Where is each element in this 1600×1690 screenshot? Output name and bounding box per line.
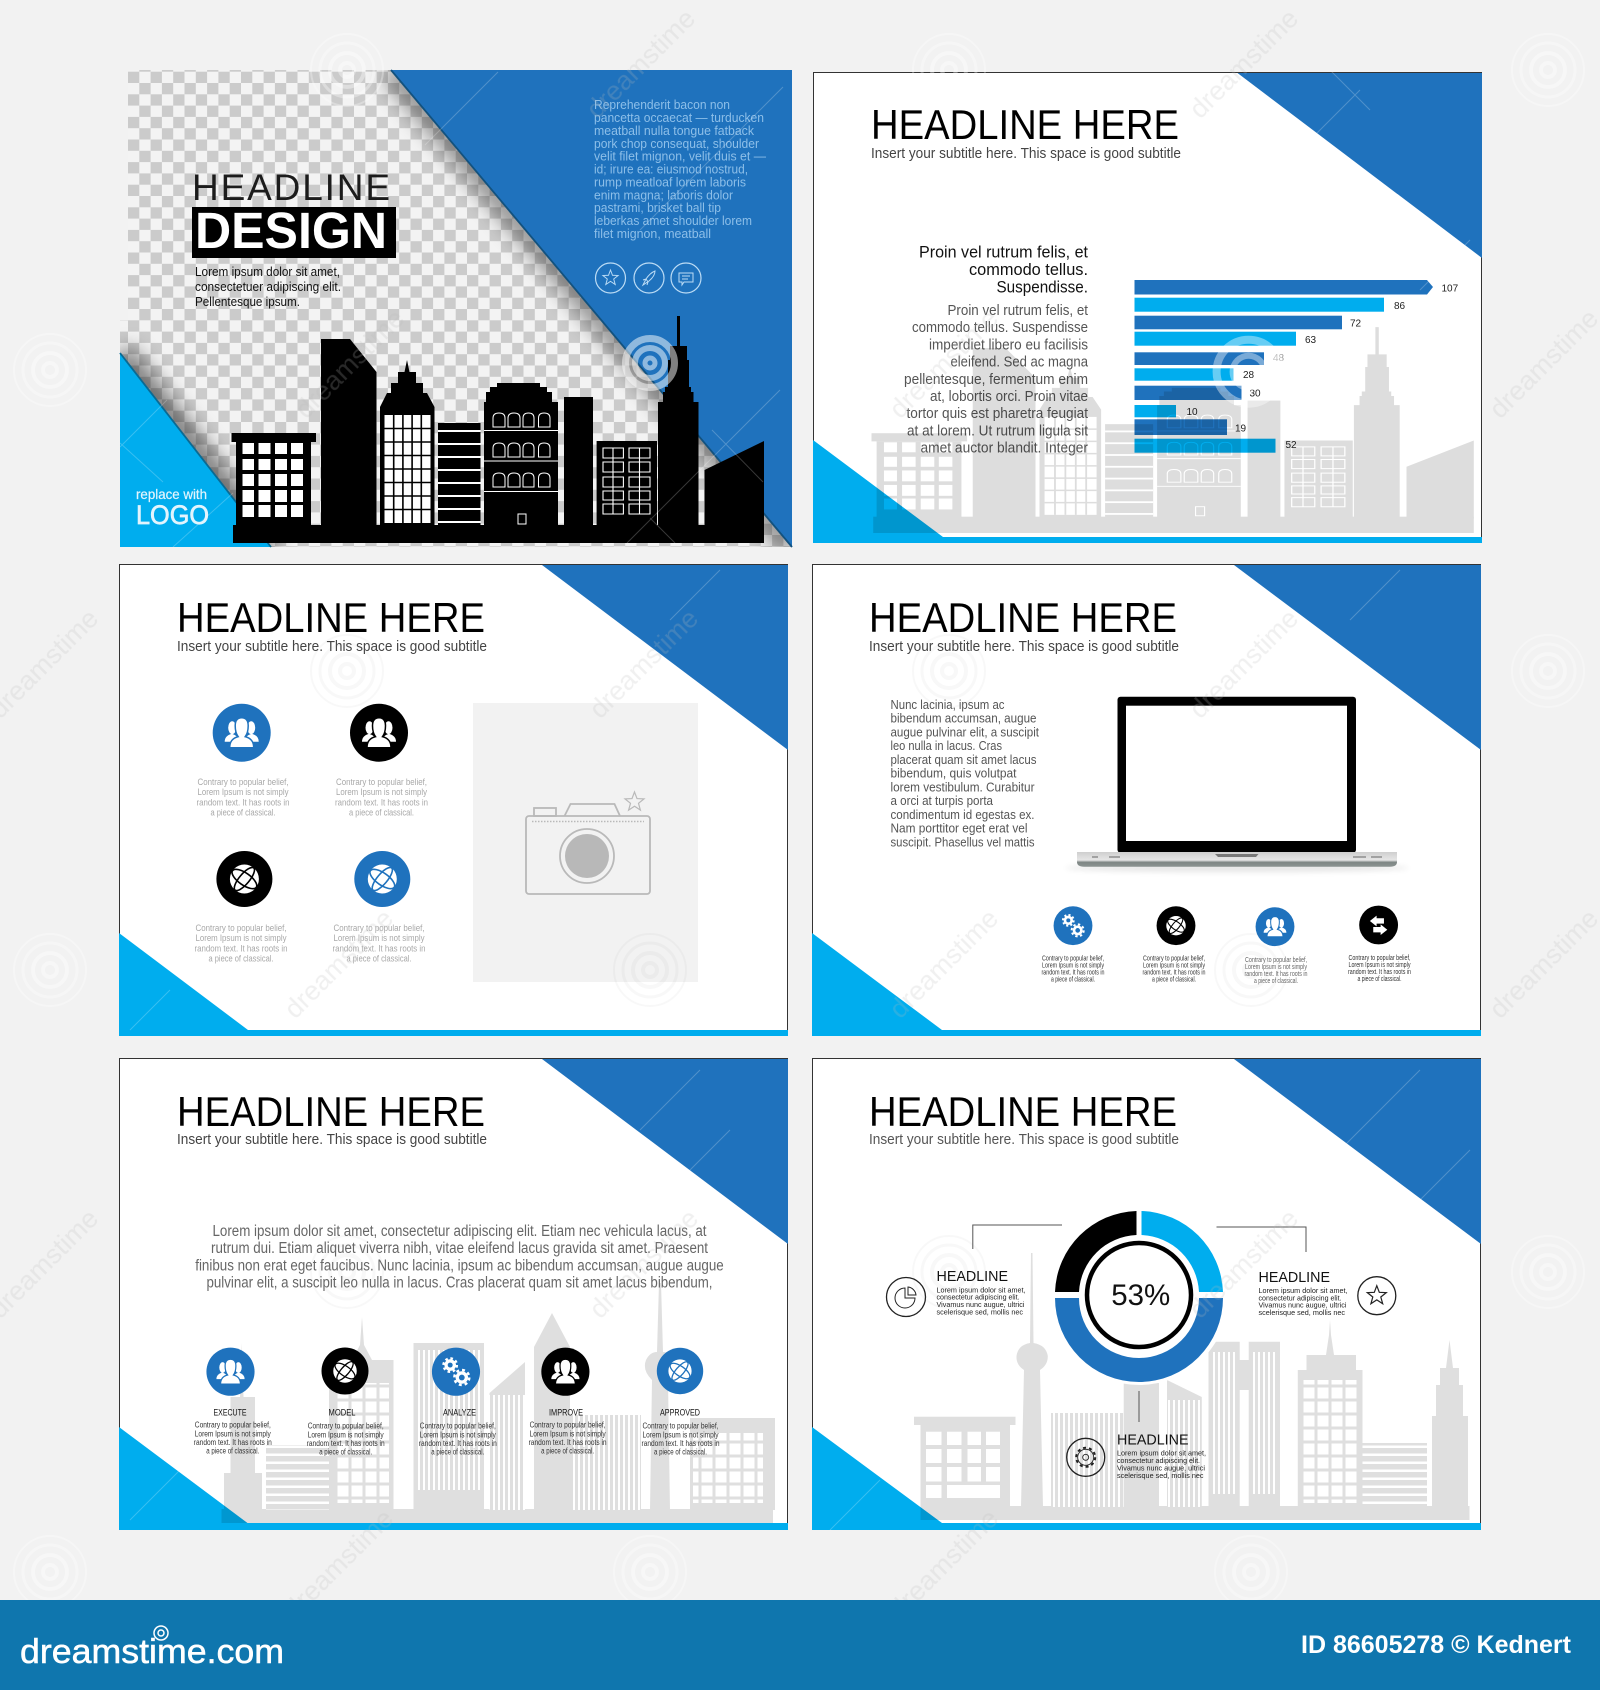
step: approved — [642, 1348, 720, 1456]
body paragraph: amet auctor blandit. Integer — [920, 440, 1088, 457]
intro paragraph: Lorem ipsum dolor sit amet, consectetur adipiscing elit. Etiam nec vehicula lacus, at — [212, 1223, 707, 1240]
caption 1: random text. It has roots in — [1042, 970, 1105, 977]
body paragraph: placerat quam sit amet lacus — [890, 753, 1036, 767]
horizontal bar chart — [1134, 280, 1459, 453]
grey city skyline — [872, 327, 1474, 533]
icon: people blue — [213, 704, 271, 762]
headline: HEADLINE HERE — [177, 594, 485, 641]
intro paragraph: rutrum dui. Etiam aliquet viverra nibh, vitae eleifend lacus gravida sit amet. Praesent — [211, 1240, 709, 1257]
blue corner triangle — [1234, 565, 1481, 750]
step: improve: random text. It has roots in — [529, 1438, 607, 1447]
caption 4: Contrary to popular belief, — [334, 923, 424, 933]
horizontal bar chart: 72 — [1350, 318, 1362, 330]
headline: HEADLINE HERE — [871, 101, 1179, 148]
body paragraph: condimentum id egestas ex. — [890, 808, 1034, 822]
icon: camera — [526, 792, 650, 894]
body paragraph — [890, 698, 1039, 849]
logo placeholder: LOGO — [136, 500, 209, 530]
headline: HEADLINE HERE — [869, 1088, 1177, 1135]
light blue corner and strip — [813, 440, 1482, 543]
watermark spirals on white slides — [311, 635, 1287, 1308]
caption 2: random text. It has roots in — [1142, 970, 1206, 977]
light blue corner and strip — [812, 1427, 1481, 1530]
step: approved: Lorem Ipsum is not simply — [642, 1430, 718, 1439]
light blue corner triangle — [120, 353, 271, 547]
watermark text: dreamstime — [883, 903, 1004, 1024]
caption 4 — [1348, 955, 1411, 983]
callout: right: HEADLINE — [1258, 1270, 1330, 1286]
caption 1 — [1042, 956, 1105, 984]
caption 4: Lorem Ipsum is not simply — [1348, 962, 1411, 969]
caption 1: Contrary to popular belief, — [1042, 956, 1104, 963]
blue panel text: velit filet mignon, velit duis et — — [594, 150, 766, 164]
callout: left: scelerisque sed, mollis nec — [936, 1307, 1023, 1316]
intro paragraph — [195, 1223, 724, 1292]
callout: bottom: scelerisque sed, mollis nec — [1117, 1471, 1204, 1480]
blue panel text: filet mignon, meatball — [594, 227, 711, 241]
bold lead text: Proin vel rutrum felis, et — [919, 244, 1088, 262]
blue panel text: meatball nulla tongue fatback — [594, 124, 755, 138]
blue panel text: enim magna; laboris dolor — [594, 188, 733, 202]
horizontal bar chart: 28 — [1243, 370, 1255, 381]
watermark cross lines — [120, 70, 1470, 1530]
callout: bottom — [1067, 1432, 1206, 1480]
icon: gears blue — [1054, 906, 1092, 945]
step: execute: Contrary to popular belief, — [195, 1421, 271, 1430]
horizontal bar chart: 19 — [1235, 424, 1247, 434]
cover intro text: Pellentesque ipsum. — [195, 295, 300, 309]
icon: rocket in circle — [634, 263, 664, 293]
watermark text: dreamstime — [883, 1503, 1004, 1624]
callout: bottom: consectetur adipiscing elit. — [1117, 1456, 1200, 1465]
panel: cover slide — [120, 70, 792, 547]
caption 3: a piece of classical. — [1254, 978, 1298, 985]
blue panel text: pancetta occaecat — turducken — [594, 111, 764, 125]
caption 1: a piece of classical. — [1051, 977, 1095, 984]
callout: bottom: Lorem ipsum dolor sit amet, — [1117, 1449, 1206, 1458]
step: analyze — [419, 1348, 497, 1456]
blue panel text: leberkas amet shoulder lorem — [594, 214, 752, 228]
caption 4: random text. It has roots in — [332, 943, 426, 953]
body paragraph: at at lorem. Ut rutrum ligula sit — [907, 422, 1089, 439]
body paragraph: pellentesque, fermentum enim — [904, 371, 1088, 388]
body paragraph: lorem vestibulum. Curabitur — [890, 780, 1034, 794]
logo placeholder: replace with — [136, 486, 207, 502]
icon: people black — [350, 704, 408, 762]
logo placeholder — [136, 486, 209, 530]
bold lead text — [919, 244, 1088, 296]
body paragraph: tortor quis est pharetra feugiat — [906, 405, 1089, 422]
watermark text: dreamstime — [278, 1503, 399, 1624]
icon: globe blue — [354, 851, 410, 907]
step: improve — [529, 1348, 607, 1456]
step: analyze: Lorem Ipsum is not simply — [420, 1430, 496, 1439]
watermark text: dreamstime — [1183, 3, 1304, 124]
caption 4: random text. It has roots in — [1348, 969, 1411, 976]
body paragraph: bibendum, quis volutpat — [890, 767, 1017, 781]
step: improve: Contrary to popular belief, — [530, 1421, 606, 1430]
step: analyze: ANALYZE — [443, 1408, 476, 1418]
body paragraph — [904, 302, 1089, 457]
callout: right: Vivamus nunc augue, ultrici — [1258, 1301, 1347, 1310]
watermark text: dreamstime — [1183, 1203, 1304, 1324]
caption 3: random text. It has roots in — [194, 943, 288, 953]
icon: chat bubble in circle — [671, 263, 701, 293]
caption 1: random text. It has roots in — [196, 797, 290, 807]
step: approved: Contrary to popular belief, — [642, 1422, 718, 1431]
blue panel text — [594, 98, 766, 241]
watermark text: dreamstime — [883, 303, 1004, 424]
caption 3: a piece of classical. — [208, 954, 274, 964]
horizontal bar chart: 48 — [1273, 353, 1285, 364]
caption 2: a piece of classical. — [349, 808, 414, 818]
horizontal bar chart: 52 — [1286, 440, 1297, 451]
body paragraph: Proin vel rutrum felis, et — [948, 302, 1089, 319]
connector lines — [973, 1225, 1306, 1422]
callout: right: consectetur adipiscing elit. — [1258, 1293, 1342, 1302]
body paragraph: Nam porttitor eget erat vel — [890, 822, 1028, 836]
step: model — [307, 1348, 385, 1456]
callout: left — [886, 1269, 1026, 1316]
step: improve: a piece of classical. — [541, 1446, 594, 1456]
body paragraph: leo nulla in lacus. Cras — [890, 739, 1002, 753]
grey city skyline — [222, 1283, 775, 1523]
callout: bottom: HEADLINE — [1117, 1432, 1189, 1448]
footer image id: ID 86605278 © Kednert — [1301, 1631, 1572, 1659]
caption 4: a piece of classical. — [1358, 976, 1402, 983]
callout: right: Lorem ipsum dolor sit amet, — [1258, 1286, 1348, 1295]
caption 2: Lorem Ipsum is not simply — [336, 787, 427, 797]
strong watermark spiral on chart — [1217, 340, 1281, 404]
step: execute: a piece of classical. — [206, 1446, 259, 1456]
step: model: random text. It has roots in — [307, 1439, 385, 1448]
watermark text: dreamstime — [289, 303, 410, 424]
panel: four icons and photo slide — [119, 564, 788, 1036]
caption 2 — [1142, 956, 1206, 984]
caption 4: Contrary to popular belief, — [1348, 955, 1411, 962]
caption 3: random text. It has roots in — [1244, 971, 1308, 978]
light blue corner and strip — [119, 933, 788, 1036]
donut chart: 53% — [1111, 1279, 1170, 1312]
step: approved: a piece of classical. — [654, 1448, 707, 1456]
panel: laptop slide — [812, 564, 1481, 1036]
subtitle: Insert your subtitle here. This space is good subtitle — [871, 145, 1181, 162]
icon: globe black — [1157, 906, 1195, 945]
step: execute: random text. It has roots in — [194, 1438, 272, 1447]
caption 1: Lorem Ipsum is not simply — [198, 787, 289, 797]
step: approved: APPROVED — [660, 1408, 700, 1418]
blue triangle dark edge — [391, 70, 792, 547]
light blue corner and strip — [812, 933, 1481, 1036]
footer logo: dreamstime.com — [20, 1633, 284, 1671]
footer bar — [0, 1600, 1600, 1690]
horizontal bar chart: 86 — [1394, 301, 1406, 312]
icon: people blue — [1256, 907, 1294, 946]
caption 2 — [335, 777, 428, 818]
watermark text: dreamstime — [278, 903, 399, 1024]
blue panel text: Reprehenderit bacon non — [594, 98, 730, 112]
subtitle: Insert your subtitle here. This space is good subtitle — [177, 638, 487, 655]
horizontal bar chart: 10 — [1186, 407, 1198, 418]
headline: HEADLINE HERE — [177, 1088, 485, 1135]
bold lead text: commodo tellus. — [969, 261, 1088, 279]
icon: globe black — [216, 851, 272, 907]
body paragraph: at, lobortis orci. Proin vitae — [930, 388, 1088, 405]
intro paragraph: finibus non erat eget faucibus. Nunc lacinia, ipsum ac bibendum accumsan, augue augue — [195, 1258, 724, 1274]
icon: star in circle — [596, 263, 626, 293]
step: analyze: a piece of classical. — [431, 1448, 484, 1456]
donut chart — [1049, 1205, 1229, 1385]
callout: right — [1258, 1270, 1396, 1317]
body paragraph: commodo tellus. Suspendisse — [912, 319, 1088, 336]
blue corner triangle — [391, 70, 792, 547]
step: model: Lorem Ipsum is not simply — [308, 1430, 384, 1439]
grey city skyline — [914, 1253, 1470, 1520]
cover intro text: Lorem ipsum dolor sit amet, — [195, 265, 340, 279]
panel: donut chart slide — [812, 1058, 1481, 1530]
bold lead text: Suspendisse. — [996, 278, 1088, 296]
light triangle dark edge — [120, 353, 271, 547]
caption 4 — [332, 923, 426, 964]
subtitle: Insert your subtitle here. This space is good subtitle — [869, 638, 1179, 655]
step: model: Contrary to popular belief, — [308, 1422, 384, 1431]
step: execute: EXECUTE — [214, 1408, 246, 1418]
watermark text: dreamstime — [580, 3, 701, 124]
blue corner triangle — [1238, 73, 1482, 258]
caption 3 — [194, 923, 288, 964]
panel: bar chart slide — [813, 72, 1482, 543]
intro paragraph: pulvinar elit, a suscipit leo nulla in lacus. Cras placerat quam sit amet lacus bibendum, — [206, 1274, 712, 1292]
headline: HEADLINE HERE — [869, 594, 1177, 641]
watermark text: dreamstime — [1183, 603, 1304, 724]
callout: left: Lorem ipsum dolor sit amet, — [936, 1285, 1026, 1294]
step: execute — [194, 1348, 272, 1456]
step: analyze: Contrary to popular belief, — [420, 1422, 496, 1431]
subtitle: Insert your subtitle here. This space is good subtitle — [869, 1131, 1179, 1148]
caption 2: Contrary to popular belief, — [1143, 956, 1205, 963]
body paragraph: augue pulvinar elit, a suscipit — [890, 726, 1039, 740]
subtitle: Insert your subtitle here. This space is good subtitle — [177, 1131, 487, 1148]
design badge: DESIGN — [195, 202, 387, 259]
body paragraph: eleifend. Sed ac magna — [950, 354, 1089, 371]
caption 1: Lorem Ipsum is not simply — [1042, 963, 1104, 970]
watermark text: dreamstime — [583, 1203, 704, 1324]
caption 4: Lorem Ipsum is not simply — [334, 933, 425, 943]
caption 2: Lorem Ipsum is not simply — [1143, 963, 1205, 970]
caption 2: random text. It has roots in — [335, 797, 428, 807]
step: execute: Lorem Ipsum is not simply — [195, 1429, 271, 1438]
caption 2: a piece of classical. — [1152, 977, 1196, 984]
light blue corner and strip — [119, 1427, 788, 1530]
caption 3: Lorem Ipsum is not simply — [1245, 964, 1307, 971]
horizontal bar chart: 107 — [1442, 284, 1459, 294]
caption 3: Contrary to popular belief, — [196, 923, 286, 933]
blue panel text: pork chop consequat, shoulder — [594, 137, 759, 151]
body paragraph: imperdiet libero eu facilisis — [929, 336, 1088, 353]
icon: arrows black — [1359, 906, 1398, 944]
body paragraph: Nunc lacinia, ipsum ac — [890, 698, 1004, 712]
callout: left: consectetur adipiscing elit. — [936, 1293, 1020, 1302]
watermark text: dreamstime — [583, 603, 704, 724]
body paragraph: a orci at turpis porta — [890, 794, 993, 808]
caption 3: Lorem Ipsum is not simply — [196, 933, 287, 943]
step: improve: IMPROVE — [549, 1408, 583, 1418]
step: approved: random text. It has roots in — [642, 1439, 720, 1448]
caption 1: a piece of classical. — [210, 808, 276, 818]
step: improve: Lorem Ipsum is not simply — [530, 1429, 606, 1438]
caption 1: Contrary to popular belief, — [198, 777, 288, 787]
callout: left: HEADLINE — [936, 1269, 1008, 1285]
caption 3 — [1244, 957, 1308, 985]
callout: left: Vivamus nunc augue, ultrici — [936, 1300, 1025, 1309]
horizontal bar chart: 30 — [1250, 388, 1261, 400]
cover intro text — [195, 265, 341, 309]
step: model: MODEL — [328, 1408, 356, 1418]
strong watermark spiral on cover — [626, 338, 674, 388]
photo placeholder — [473, 703, 698, 982]
blue corner triangle — [1234, 1059, 1481, 1244]
cover headline: HEADLINE — [192, 167, 390, 208]
body paragraph: suscipit. Phasellus vel mattis — [890, 835, 1034, 849]
blue corner triangle — [542, 565, 788, 750]
horizontal bar chart: 63 — [1305, 335, 1317, 346]
blue corner triangle — [542, 1059, 788, 1244]
blue panel text: pastrami, brisket ball tip — [594, 201, 721, 215]
black city skyline — [232, 316, 764, 543]
step: model: a piece of classical. — [319, 1448, 372, 1456]
laptop — [1065, 697, 1409, 872]
callout: right: scelerisque sed, mollis nec — [1258, 1308, 1345, 1317]
callout: bottom: Vivamus nunc augue, ultrici — [1117, 1464, 1205, 1473]
cover intro text: consectetuer adipiscing elit. — [195, 280, 341, 294]
caption 1 — [196, 777, 290, 818]
caption 2: Contrary to popular belief, — [336, 777, 427, 787]
step: analyze: random text. It has roots in — [419, 1439, 497, 1448]
body paragraph: bibendum accumsan, augue — [890, 712, 1037, 726]
blue panel text: rump meatloaf lorem laboris — [594, 176, 746, 190]
caption 3: Contrary to popular belief, — [1245, 957, 1307, 964]
blue panel text: id; irure ea: eiusmod nostrud, — [594, 162, 748, 176]
panel: process steps slide — [119, 1058, 788, 1530]
caption 4: a piece of classical. — [346, 954, 412, 964]
